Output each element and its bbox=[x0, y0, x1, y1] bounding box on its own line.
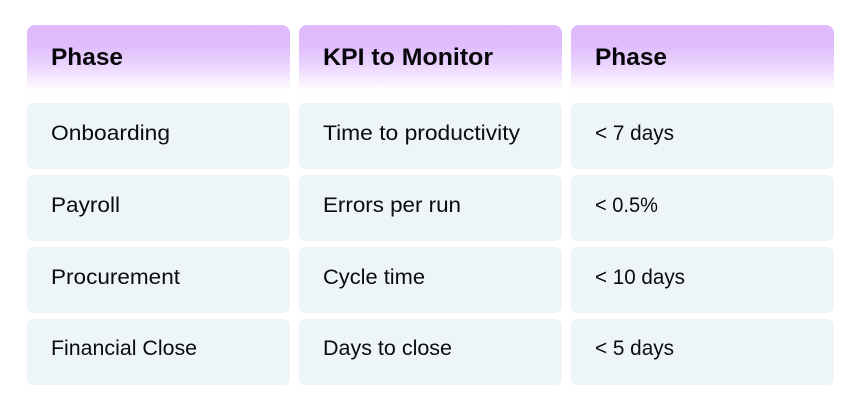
row: Procurement: Cycle time bbox=[323, 265, 425, 289]
row: Payroll: Payroll bbox=[51, 193, 120, 217]
row: Financial Close bbox=[27, 319, 834, 385]
row: Onboarding: Onboarding bbox=[51, 121, 170, 145]
header: Phase (target column): Phase bbox=[595, 44, 667, 71]
header: KPI to Monitor: KPI to Monitor bbox=[323, 44, 493, 71]
row: Procurement bbox=[27, 247, 834, 313]
header: KPI to Monitor bbox=[299, 25, 562, 91]
row: Onboarding: Time to productivity bbox=[323, 121, 520, 145]
header: Phase: Phase bbox=[51, 44, 123, 71]
row: Procurement: < 10 days bbox=[595, 265, 685, 289]
row: Procurement: Procurement bbox=[51, 265, 180, 289]
row: Onboarding bbox=[27, 103, 834, 169]
row: Payroll: < 0.5% bbox=[595, 193, 658, 217]
row: Financial Close: Days to close bbox=[323, 336, 452, 360]
header: Phase (target column) bbox=[571, 25, 834, 91]
row: Financial Close: < 5 days bbox=[595, 336, 674, 360]
header: Phase bbox=[27, 25, 290, 91]
row: Payroll bbox=[27, 175, 834, 241]
row: Payroll: Errors per run bbox=[323, 193, 461, 217]
row: Onboarding: < 7 days bbox=[595, 121, 674, 145]
row: Financial Close: Financial Close bbox=[51, 336, 197, 360]
